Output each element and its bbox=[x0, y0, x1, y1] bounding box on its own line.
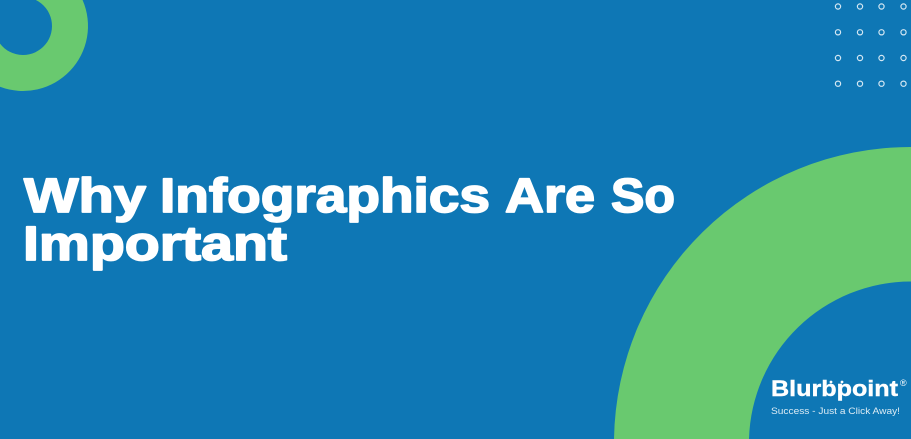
dot grid bbox=[835, 4, 906, 86]
logo: Blurbpoint: ® bbox=[900, 378, 907, 388]
title: Why bbox=[24, 170, 146, 223]
top-left green ring bbox=[0, 0, 88, 91]
title: Infographics bbox=[160, 170, 490, 223]
logo: Blurbpoint: Blurbpoint bbox=[771, 376, 899, 401]
title bbox=[23, 170, 675, 271]
bottom-right green arc bbox=[614, 147, 911, 439]
title: So bbox=[611, 170, 675, 223]
title: Important bbox=[23, 218, 287, 271]
logo: Blurbpoint bbox=[771, 376, 907, 417]
logo: Blurbpoint: Success - Just a Click Away! bbox=[771, 406, 900, 417]
title: Are bbox=[505, 170, 595, 223]
